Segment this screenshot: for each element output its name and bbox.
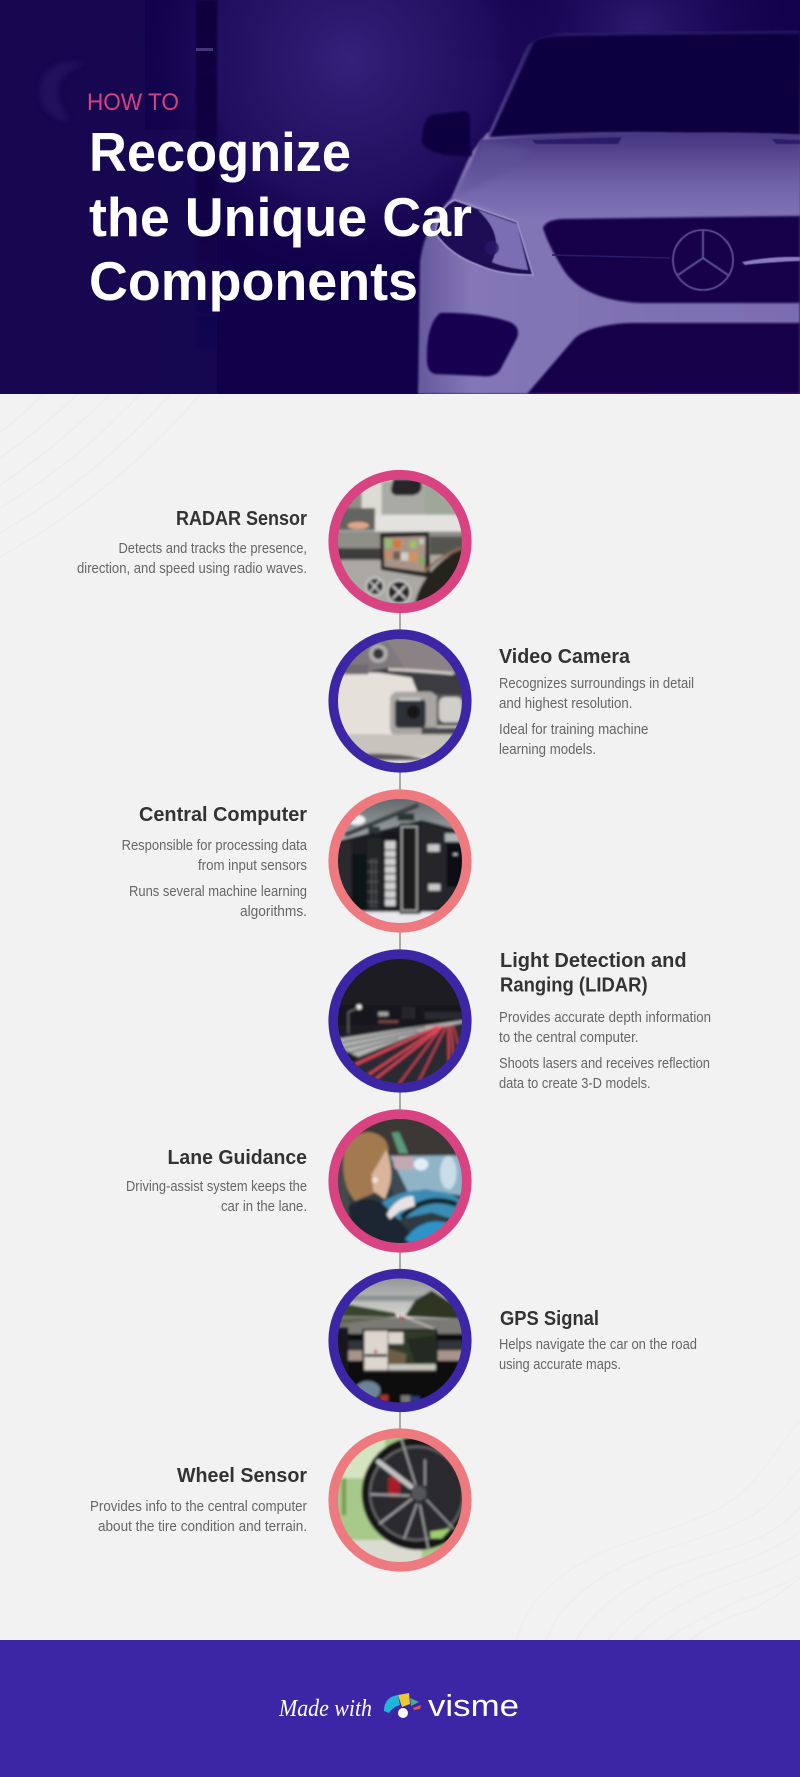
pole collar — [196, 48, 213, 51]
heading: Wheel Sensor — [177, 1465, 307, 1487]
description: Provides info to the central computer — [90, 1499, 307, 1515]
heading: Lane Guidance — [168, 1147, 307, 1169]
description: car in the lane. — [221, 1199, 307, 1215]
description — [499, 1337, 697, 1373]
header hero panel with car photo — [0, 0, 800, 394]
grille chrome bar — [742, 257, 800, 265]
description: Provides accurate depth information — [499, 1010, 711, 1026]
description — [90, 1499, 307, 1535]
photo: car navigation display — [338, 1278, 462, 1402]
photo: woman driving — [338, 1119, 462, 1243]
heading — [500, 950, 687, 996]
description: learning models. — [499, 742, 596, 758]
item 1: RADAR Sensor — [77, 475, 467, 608]
description: Responsible for processing data — [122, 838, 308, 854]
glow above roof — [544, 0, 743, 35]
item 5: Lane Guidance — [126, 1114, 467, 1249]
roof frame and pillar — [487, 31, 800, 140]
faint wall sign — [42, 64, 74, 118]
windshield — [490, 33, 800, 137]
description: direction, and speed using radio waves. — [77, 561, 307, 577]
main title: Recognize — [89, 121, 351, 183]
air intake — [427, 313, 518, 376]
description: Recognizes surroundings in detail — [499, 676, 694, 692]
footer band — [0, 1640, 800, 1777]
description: using accurate maps. — [499, 1357, 621, 1373]
pole — [196, 0, 217, 350]
ring — [333, 954, 467, 1088]
heading: GPS Signal — [500, 1308, 599, 1330]
made with script text: Made with — [278, 1696, 372, 1722]
description: and highest resolution. — [499, 696, 632, 712]
visme logo mark — [384, 1693, 421, 1718]
description: data to create 3-D models. — [499, 1076, 651, 1092]
description: about the tire condition and terrain. — [98, 1519, 307, 1535]
photo: alloy wheel — [338, 1438, 462, 1562]
main title: the Unique Car — [89, 186, 472, 248]
heading: Ranging (LIDAR) — [500, 974, 648, 996]
ring — [333, 1274, 467, 1407]
hood — [452, 133, 800, 226]
item 7: Wheel Sensor — [90, 1433, 475, 1568]
main title: Components — [89, 250, 418, 312]
ring — [333, 1114, 467, 1248]
grille — [543, 216, 800, 303]
heading: Video Camera — [499, 646, 631, 668]
description: algorithms. — [240, 904, 307, 920]
grille left line — [552, 255, 670, 258]
heading: Central Computer — [139, 804, 307, 826]
lower panel beside pole — [145, 130, 217, 394]
description: Runs several machine learning — [129, 884, 307, 900]
photo: car dashboard screen — [338, 480, 462, 604]
description: from input sensors — [198, 858, 307, 874]
hood vents — [532, 137, 622, 144]
ring — [333, 475, 467, 608]
star badge — [673, 230, 733, 290]
lower grille — [527, 323, 800, 394]
photo: drone camera — [338, 639, 462, 763]
description: Shoots lasers and receives reflection — [499, 1056, 710, 1072]
ring — [333, 794, 467, 928]
ring — [333, 1433, 467, 1567]
description — [126, 1179, 307, 1215]
item 6: GPS Signal — [333, 1274, 697, 1412]
kicker: how to: HOW TO — [87, 89, 179, 116]
photo: night highway light trails — [338, 959, 462, 1083]
heading: RADAR Sensor — [176, 508, 307, 530]
item 4: LIDAR — [333, 950, 711, 1092]
hood left shade — [463, 146, 496, 189]
item 2: Video Camera — [333, 634, 694, 774]
description: to the central computer. — [499, 1030, 638, 1046]
main title — [89, 121, 472, 312]
ring — [333, 634, 467, 768]
headlight — [435, 200, 533, 275]
heading: Light Detection and — [500, 950, 687, 972]
visme wordmark: visme — [428, 1688, 519, 1723]
timeline connector line — [399, 600, 401, 1440]
description — [499, 676, 694, 758]
description — [122, 838, 308, 920]
description: Driving-assist system keeps the — [126, 1179, 307, 1195]
left column — [0, 0, 145, 394]
wall glow — [178, 0, 519, 232]
side mirror — [422, 111, 472, 156]
item 3: Central Computer — [122, 794, 467, 928]
description: Ideal for training machine — [499, 722, 648, 738]
description — [77, 541, 307, 577]
car body — [418, 133, 800, 394]
photo: server racks — [338, 799, 462, 923]
description: Detects and tracks the presence, — [118, 541, 307, 557]
description: Helps navigate the car on the road — [499, 1337, 697, 1353]
description — [499, 1010, 711, 1092]
